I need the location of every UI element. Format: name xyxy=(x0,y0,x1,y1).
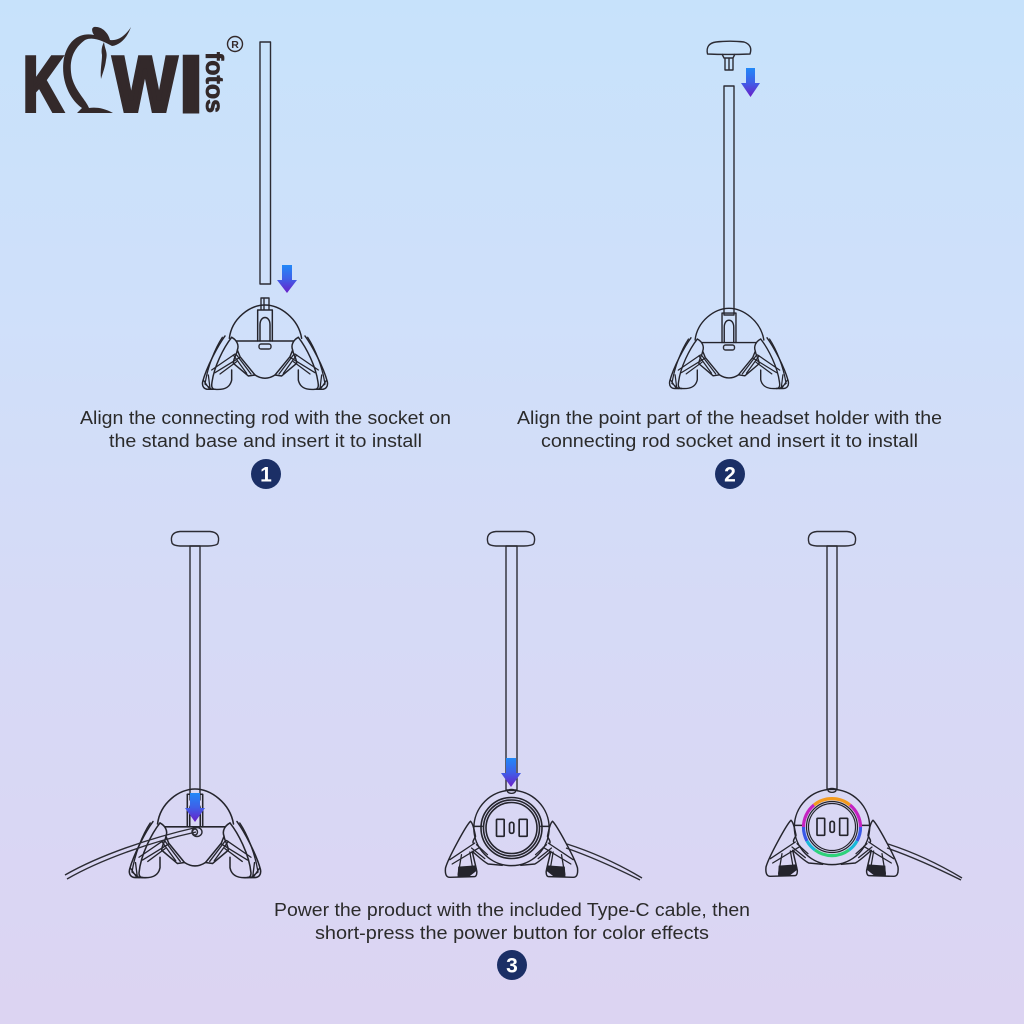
number badge 3 xyxy=(497,950,527,980)
number badge 2: 2 xyxy=(724,464,736,486)
step 1: rod and stand base illustration xyxy=(202,42,328,389)
step 3 middle: front view xyxy=(445,532,642,880)
number badge 3: 3 xyxy=(506,954,518,978)
logo: KIWI fotos xyxy=(23,27,242,128)
step 3 caption: Power the product with the included Type-C cable, then xyxy=(274,900,750,920)
step 2 caption xyxy=(517,408,942,451)
step 3 caption xyxy=(274,900,750,943)
number badge 2 xyxy=(715,459,745,489)
logo: KIWI fotos: fotos xyxy=(200,52,228,113)
logo: KIWI fotos: R xyxy=(231,39,239,51)
inner rings of lit ring xyxy=(806,802,858,852)
step 1 caption: the stand base and insert it to install xyxy=(109,431,422,451)
step 3 caption: short-press the power button for color effects xyxy=(315,923,709,943)
number badge 1: 1 xyxy=(260,464,272,486)
logo: KIWI fotos: W xyxy=(113,40,177,128)
step 2 caption: Align the point part of the headset holder with the xyxy=(517,408,942,428)
step 2 caption: connecting rod socket and insert it to install xyxy=(541,431,918,451)
step 3 left: back view with cable xyxy=(65,532,261,879)
logo: KIWI fotos: I xyxy=(180,40,202,128)
step 1 caption xyxy=(80,408,451,451)
rainbow ring xyxy=(803,799,861,856)
step 1 caption: Align the connecting rod with the socket on xyxy=(80,408,451,428)
number badge 1 xyxy=(251,459,281,489)
logo: KIWI fotos: K xyxy=(23,40,63,128)
step 2: headset holder, rod and stand base illustration xyxy=(670,41,788,389)
step 3 right: front view with RGB ring lit xyxy=(766,532,962,880)
